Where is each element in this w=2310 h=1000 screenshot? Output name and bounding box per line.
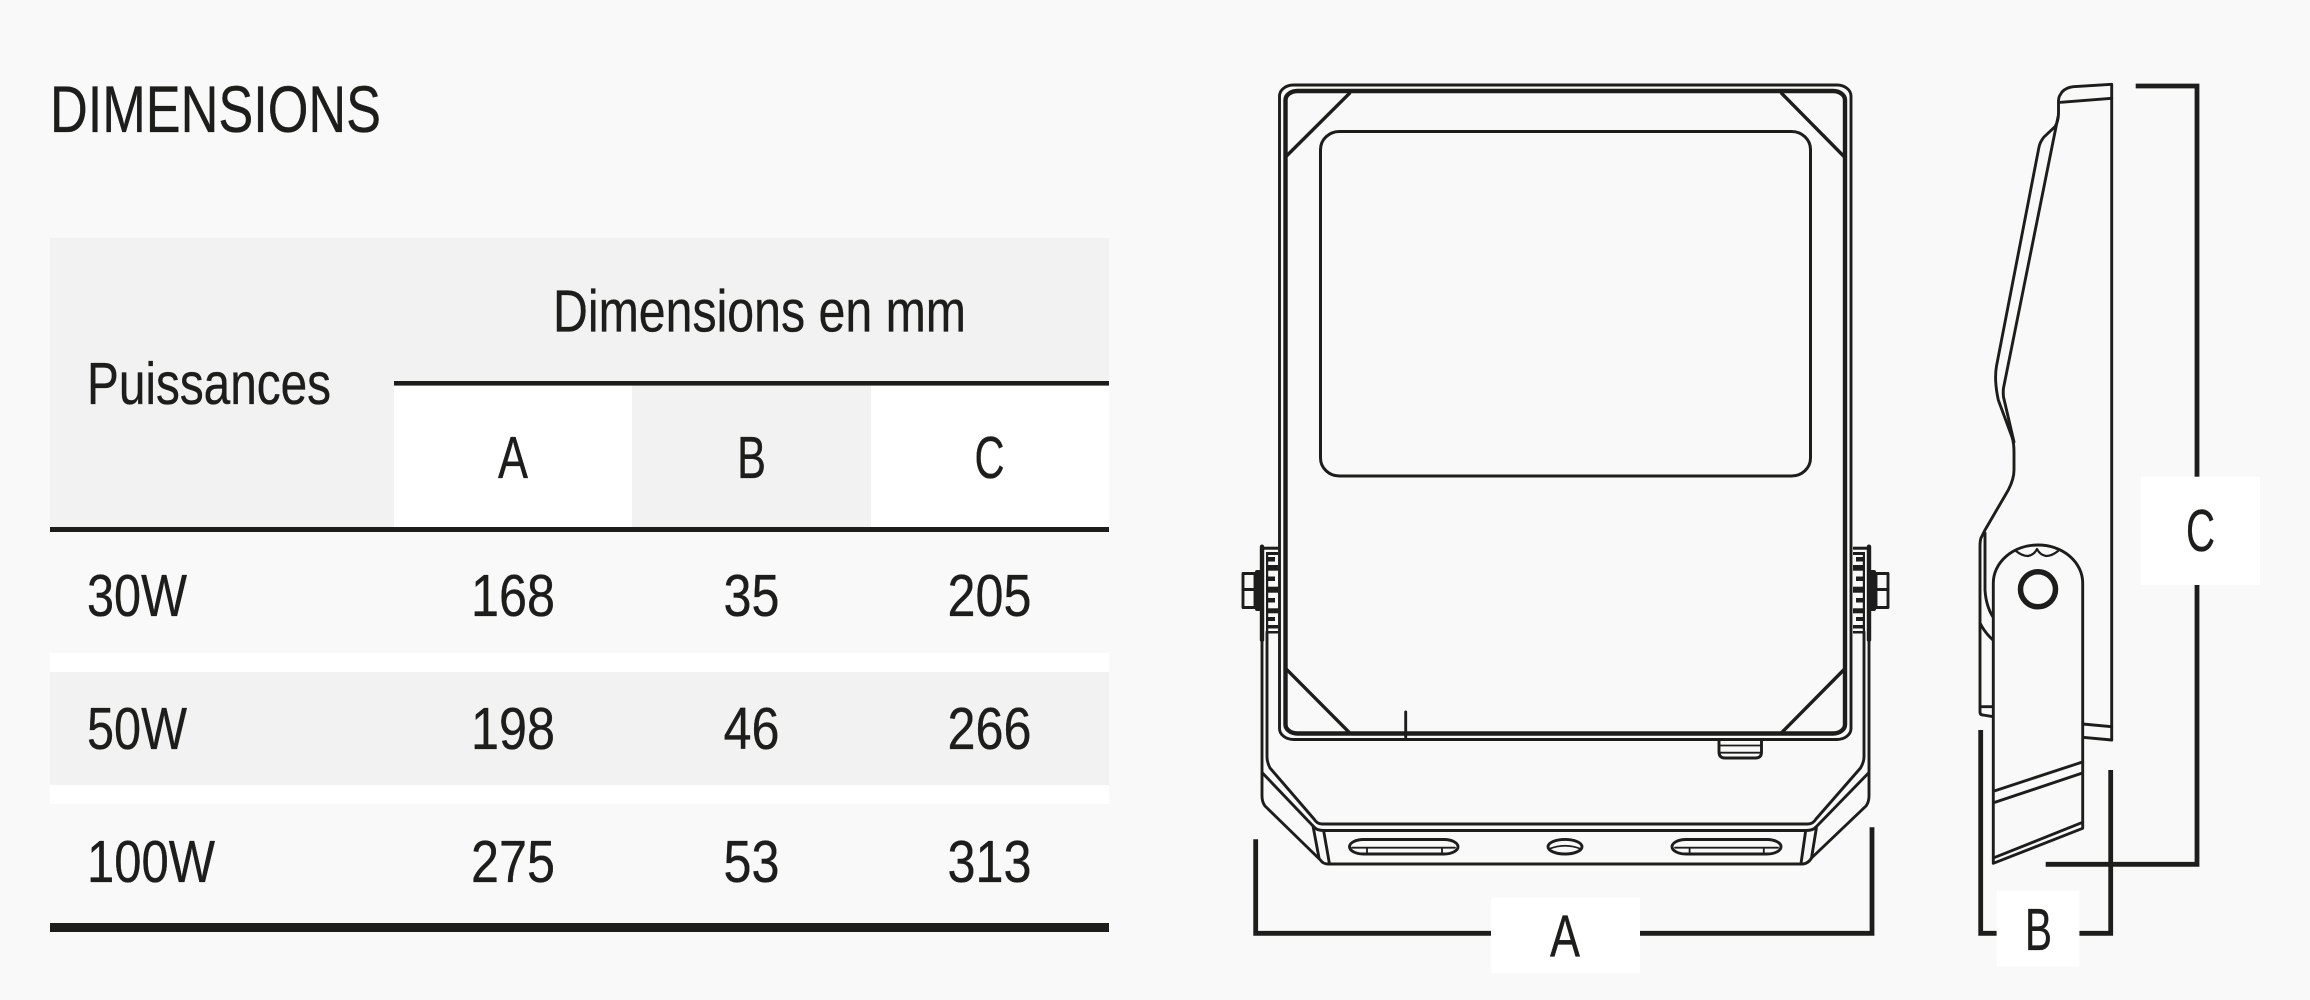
row 100W: [50, 785, 1109, 932]
row 50W: [50, 672, 1109, 785]
front view of floodlight: [1243, 85, 1888, 864]
row 30W: 168: [471, 563, 555, 629]
row 50W: 50W: [87, 696, 187, 762]
row 30W: 205: [948, 563, 1032, 629]
row 100W: 53: [724, 829, 780, 895]
pivot ring: [2020, 572, 2056, 607]
row 30W: 35: [724, 563, 780, 629]
side view of floodlight: [1980, 84, 2112, 863]
LED window: [1320, 132, 1810, 476]
row 50W: 46: [724, 696, 780, 762]
table header: power column and dimensions span: C: [974, 425, 1004, 491]
row 30W: 30W: [87, 563, 187, 629]
right pivot bolt and gear: [1853, 547, 1888, 634]
row 100W: 100W: [87, 829, 215, 895]
cable tick: [1404, 712, 1407, 738]
title: DIMENSIONS: [50, 72, 381, 146]
dimensions table: [50, 238, 1109, 932]
bottom tab: [1719, 741, 1762, 758]
housing outline: [1280, 85, 1851, 740]
dimension C: [2046, 86, 2260, 864]
left pivot bolt and gear: [1243, 547, 1278, 634]
dimension A: A: [1550, 904, 1580, 970]
housing profile: [1980, 84, 2112, 740]
mounting arm: [1993, 545, 2083, 863]
row 50W: 266: [948, 696, 1032, 762]
row 100W: 275: [471, 829, 555, 895]
row 30W: [50, 563, 1109, 672]
table header: power column and dimensions span: Puissances: [87, 351, 331, 417]
dimension A: [1256, 827, 1872, 973]
table header: power column and dimensions span: B: [737, 425, 766, 491]
bracket: [1262, 547, 1869, 864]
row 50W: 198: [471, 696, 555, 762]
bracket slots: [1350, 839, 1781, 854]
table header: power column and dimensions span: Dimensions en mm: [553, 278, 966, 344]
table header: power column and dimensions span: A: [498, 425, 528, 491]
dimension C: C: [2186, 498, 2215, 564]
table header: power column and dimensions span: [50, 238, 1109, 532]
dimension B: B: [2025, 897, 2052, 963]
dimension B: [1981, 730, 2111, 967]
row 100W: 313: [948, 829, 1032, 895]
